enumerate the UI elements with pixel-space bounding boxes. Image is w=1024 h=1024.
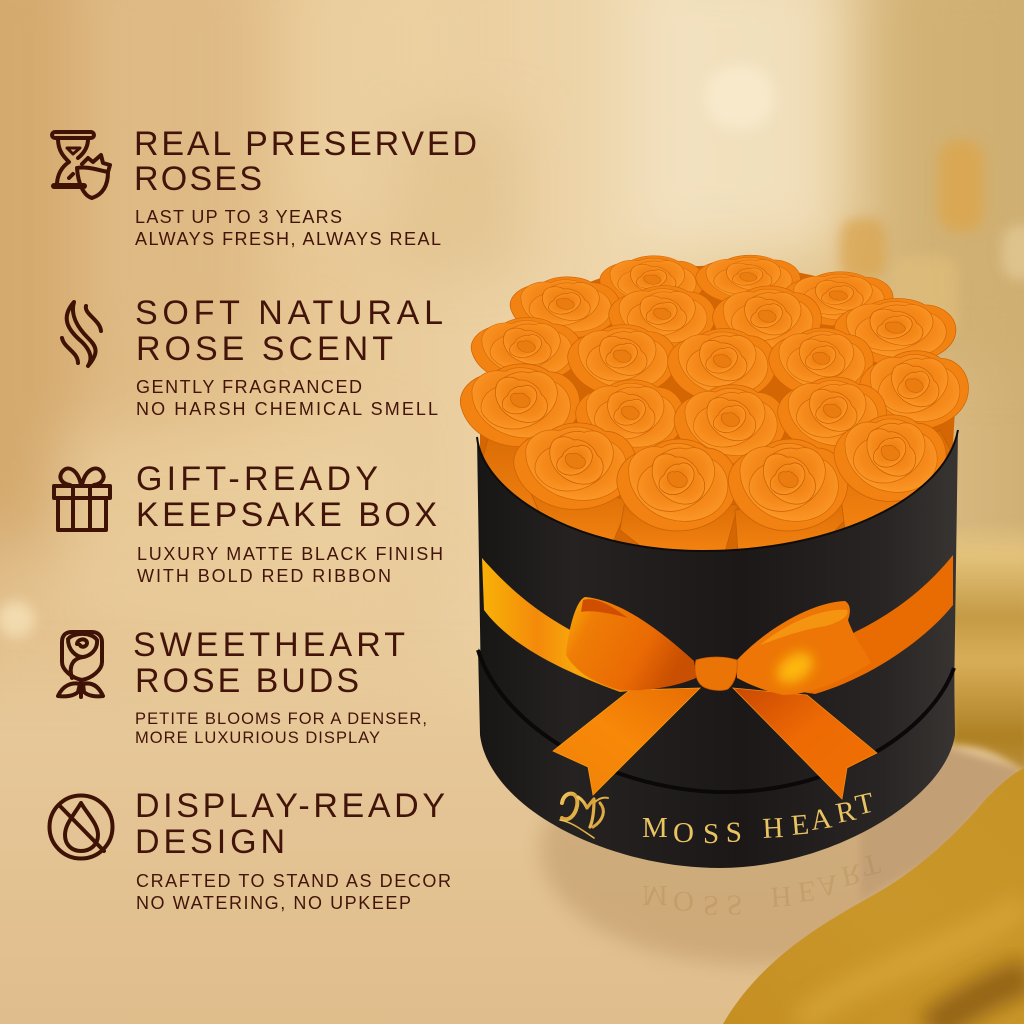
ribbon tail left [553,688,700,795]
heading: ROSES [134,160,262,198]
brand logo [560,794,608,838]
description: ALWAYS FRESH, ALWAYS REAL [135,229,441,249]
gold silk fabric back [950,520,1024,775]
table surface [0,620,1024,1024]
box reflection on table [540,735,1024,965]
heading: ROSE BUDS [135,662,359,700]
bow loop left [566,597,696,690]
box lower band [478,648,955,868]
bow loop right [737,601,871,695]
heading: DISPLAY-READY [135,787,445,825]
heading: ROSE SCENT [136,330,393,368]
gold silk fabric front [723,768,1024,1024]
feature 5: display-ready design [50,787,451,913]
description: NO HARSH CHEMICAL SMELL [136,399,438,419]
description: WITH BOLD RED RIBBON [137,566,391,586]
icon: scent waves [62,302,101,366]
heading: GIFT-READY [136,460,378,498]
icon: hourglass and rose [52,132,110,198]
feature 4: sweetheart rose buds [58,626,427,747]
box upper body [477,430,958,800]
feature 3: gift-ready keepsake box [54,460,443,586]
icon: gift box [54,468,110,530]
description: CRAFTED TO STAND AS DECOR [136,871,451,891]
heading: SWEETHEART [133,626,405,664]
box reflection on table: MOSS HEART [642,847,884,921]
ribbon bow [553,597,877,799]
description: GENTLY FRAGRANCED [136,377,362,397]
heading: KEEPSAKE BOX [136,496,437,534]
heading: DESIGN [135,823,285,861]
feature 2: soft natural rose scent [62,294,443,419]
heading: SOFT NATURAL [135,294,443,332]
product: rose box [460,251,968,868]
description: NO WATERING, NO UPKEEP [136,893,411,913]
roses [460,251,968,552]
heading: REAL PRESERVED [134,125,477,163]
feature 1: real preserved roses [52,125,477,249]
description: PETITE BLOOMS FOR A DENSER, [135,710,427,728]
ribbon tail right [733,688,877,799]
rose base [480,266,955,552]
icon: no water drop [50,796,112,858]
bow knot [695,657,737,690]
description: LAST UP TO 3 YEARS [135,207,342,227]
icon: rose bud [58,632,103,697]
brand name: MOSS HEART [642,787,877,850]
ribbon band [482,558,640,692]
rose stems [480,430,950,552]
description: LUXURY MATTE BLACK FINISH [137,544,443,564]
description: MORE LUXURIOUS DISPLAY [135,729,380,747]
